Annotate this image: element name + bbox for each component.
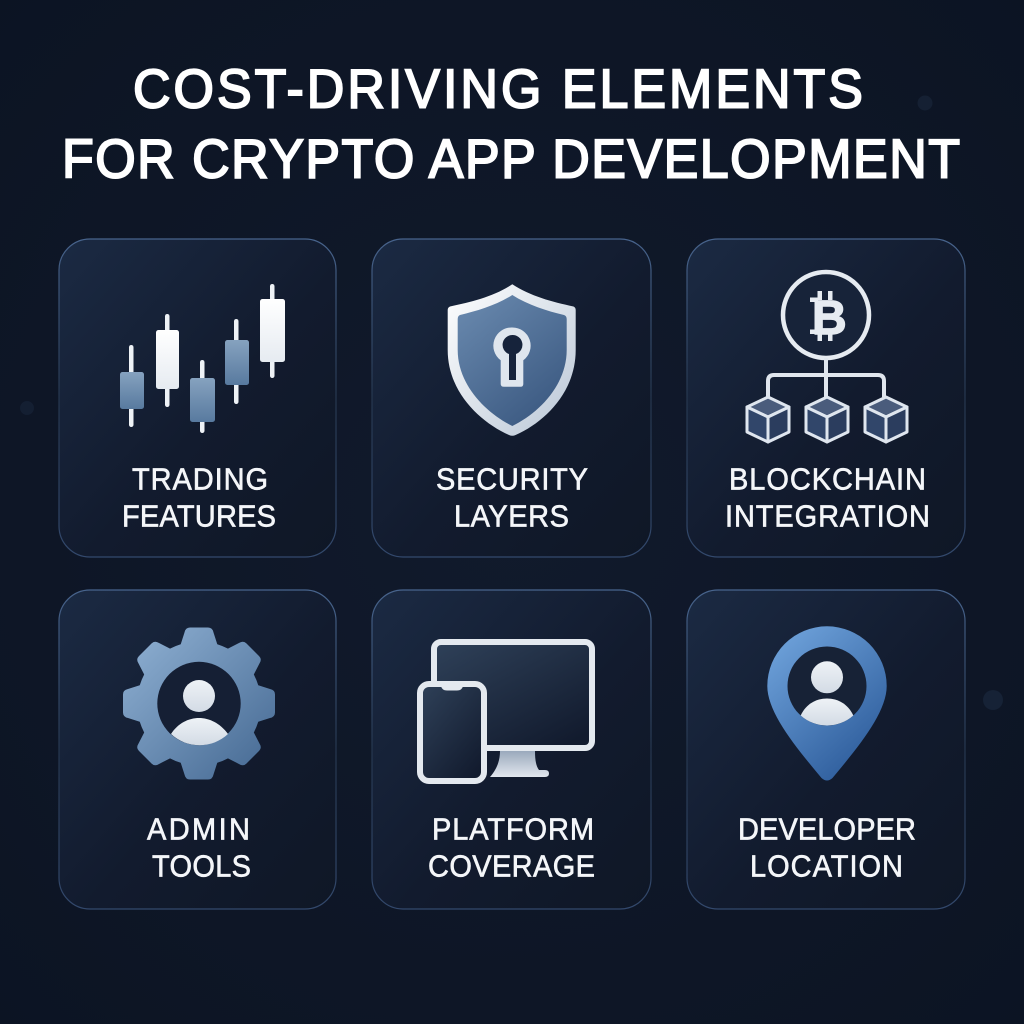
label: security layers bbox=[436, 463, 588, 534]
label: blockchain integration bbox=[725, 463, 930, 534]
label: platform coverage: PLATFORM bbox=[432, 813, 594, 847]
icon: bitcoin network: B bbox=[812, 292, 847, 345]
panel: platform coverage bbox=[372, 590, 651, 909]
label: developer location: LOCATION bbox=[750, 850, 903, 884]
panel: trading features bbox=[59, 239, 336, 557]
label: admin tools bbox=[147, 813, 251, 884]
icon: gear with person bbox=[120, 625, 278, 783]
panel: developer location bbox=[687, 590, 965, 909]
panel: blockchain integration bbox=[687, 239, 965, 557]
icon: block 2 bbox=[806, 397, 848, 442]
label: security layers: SECURITY bbox=[436, 463, 588, 497]
icon: shield with keyhole bbox=[448, 284, 576, 436]
label: blockchain integration: INTEGRATION bbox=[725, 500, 930, 534]
icon: monitor and phone bbox=[420, 642, 592, 781]
icon: block 1 bbox=[747, 397, 789, 442]
label: developer location: DEVELOPER bbox=[738, 813, 916, 847]
label: trading features: FEATURES bbox=[122, 500, 276, 534]
label: trading features bbox=[122, 463, 276, 534]
title: FOR CRYPTO APP DEVELOPMENT bbox=[62, 129, 960, 190]
label: admin tools: ADMIN bbox=[147, 813, 250, 847]
icon: bitcoin network bbox=[747, 272, 907, 442]
icon: candlestick chart bbox=[120, 284, 285, 433]
label: platform coverage: COVERAGE bbox=[428, 850, 595, 884]
label: trading features: TRADING bbox=[132, 463, 268, 497]
label: developer location bbox=[738, 813, 916, 884]
panel: security layers bbox=[372, 239, 651, 557]
title bbox=[62, 59, 960, 190]
title: COST-DRIVING ELEMENTS bbox=[133, 59, 863, 120]
icon: block 3 bbox=[865, 397, 907, 442]
label: security layers: LAYERS bbox=[454, 500, 569, 534]
icon: location pin with person bbox=[767, 626, 887, 780]
label: admin tools: TOOLS bbox=[152, 850, 251, 884]
label: platform coverage bbox=[428, 813, 595, 884]
label: blockchain integration: BLOCKCHAIN bbox=[729, 463, 926, 497]
panel: admin tools bbox=[59, 590, 336, 909]
